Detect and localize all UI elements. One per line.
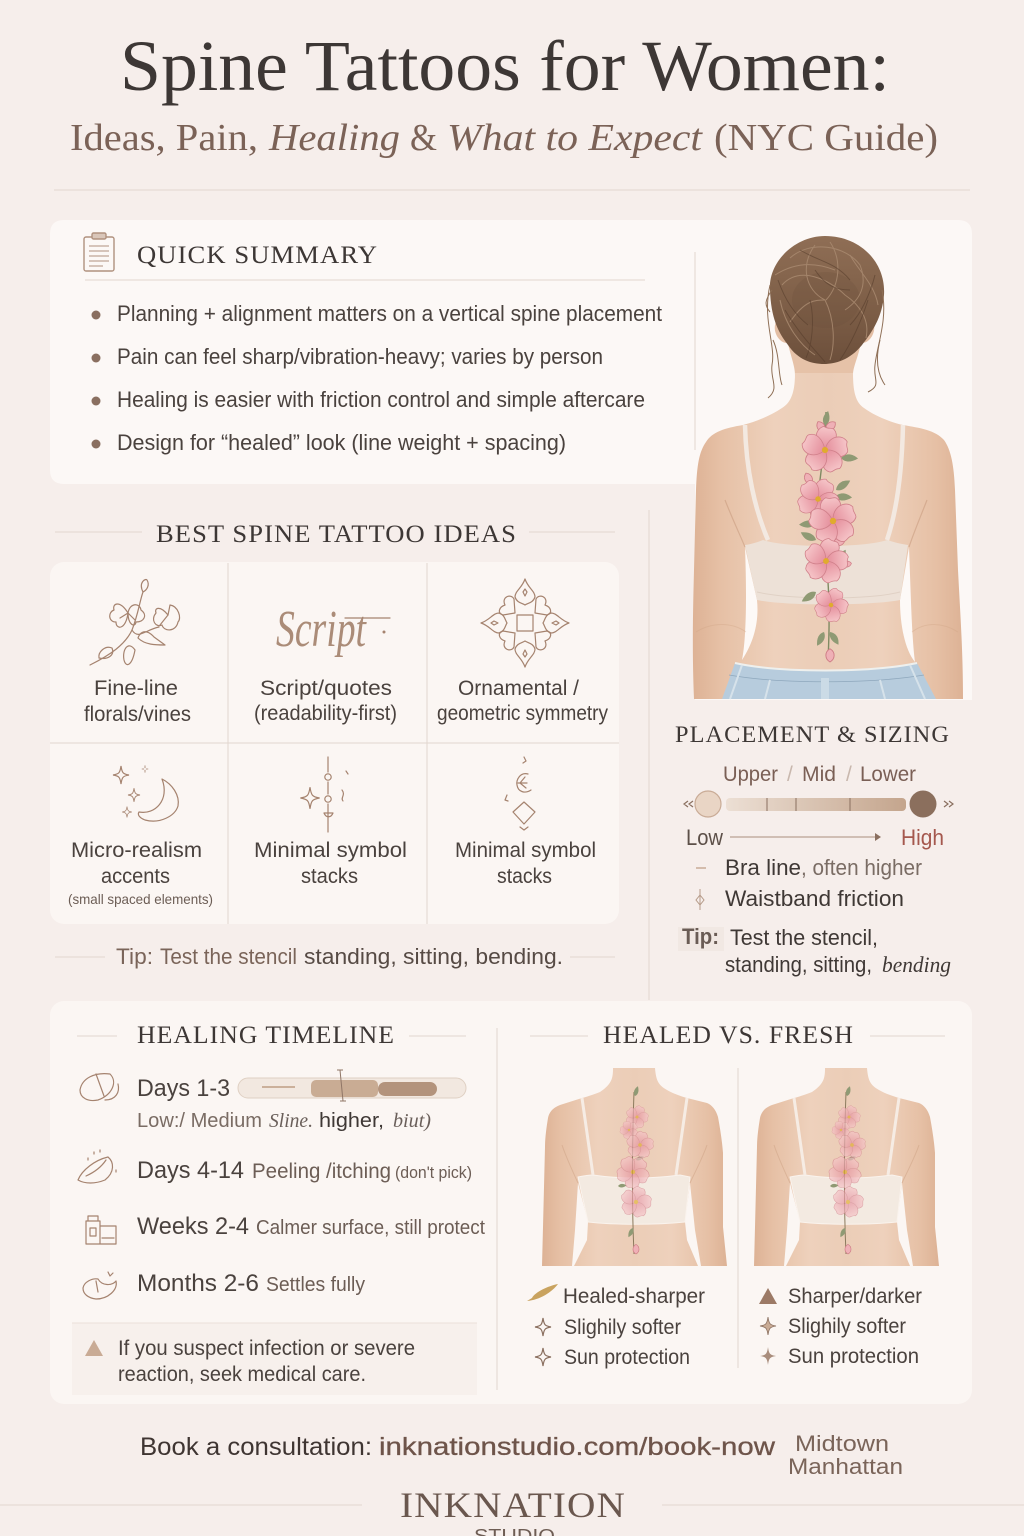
logo: inknation studio: INKNATION	[400, 1485, 626, 1525]
icon: floral branch	[90, 580, 180, 665]
icon: settled skin	[83, 1272, 116, 1299]
label: micro-realism accents: accents	[101, 865, 170, 888]
icon: script lettering: Script	[276, 601, 367, 658]
list: fresh notes	[759, 1285, 922, 1368]
summary bullet list: Design for “healed” look (line weight + spacing)	[117, 430, 566, 455]
placement labels: Upper	[723, 763, 778, 786]
summary bullet list	[92, 301, 662, 455]
timeline row: days 4-14	[78, 1150, 472, 1184]
subtitle: Ideas, Pain,	[70, 117, 258, 159]
timeline row: days 4-14: Peeling /itching	[252, 1160, 391, 1183]
label: minimal symbol stacks second: Minimal symbol	[455, 839, 596, 862]
placement labels: /	[787, 763, 793, 786]
subtitle: (NYC Guide)	[714, 117, 938, 159]
list: healed notes: Slighily softer	[564, 1316, 681, 1339]
panel: tattoo ideas grid	[50, 562, 619, 924]
idea: minimal symbol stacks second	[455, 757, 596, 888]
heading: healed vs fresh: HEALED VS. FRESH	[603, 1022, 854, 1049]
icon: aftercare jars	[86, 1216, 116, 1244]
label: script quotes: (readability-first)	[254, 702, 397, 725]
logo: inknation studio	[0, 1485, 1024, 1536]
timeline row: weeks 2-4	[86, 1213, 485, 1244]
idea: fine-line florals	[84, 580, 191, 726]
tip: placement: Test the stencil,	[730, 925, 878, 950]
list: healed notes: Sun protection	[564, 1346, 690, 1369]
tip: stencil testing: standing, sitting, bending.	[304, 944, 563, 969]
note: days 1-3: Low:/ Medium	[137, 1110, 262, 1132]
icon: feather	[527, 1284, 558, 1301]
label: minimal symbol stacks	[254, 839, 407, 888]
timeline row: days 4-14: Days 4-14	[137, 1157, 244, 1184]
footer: call to action: Book a consultation:	[140, 1433, 372, 1461]
note: days 1-3: Sline.	[269, 1110, 313, 1132]
label: micro-realism accents	[68, 839, 213, 907]
list: fresh notes: Sun protection	[788, 1345, 919, 1368]
placement labels: Lower	[860, 763, 916, 786]
icon: moon and stars	[113, 765, 178, 821]
icon: bandage	[80, 1074, 118, 1101]
bar: days 1-3 intensity	[238, 1070, 466, 1101]
tip: placement: standing, sitting,	[725, 952, 872, 977]
idea: script quotes	[254, 601, 397, 725]
summary bullet list: Healing is easier with friction control and simple aftercare	[117, 387, 645, 412]
floral spine tattoo	[787, 410, 863, 662]
footer: call to action: inknationstudio.com/book-now	[379, 1433, 776, 1461]
timeline row: days 1-3: Days 1-3	[137, 1075, 230, 1102]
label: minimal symbol stacks second: stacks	[497, 865, 552, 888]
placement labels: /	[846, 763, 852, 786]
list: fresh notes: Slighily softer	[788, 1315, 906, 1338]
placement labels: Mid	[802, 763, 836, 786]
icon: warning triangle	[759, 1288, 777, 1304]
subtitle: Healing	[268, 117, 400, 159]
note: bra line	[696, 855, 922, 880]
label: minimal symbol stacks second	[455, 839, 596, 888]
timeline row: months 2-6: Settles fully	[266, 1274, 365, 1296]
bra top	[745, 425, 908, 604]
idea: micro-realism accents	[68, 765, 213, 907]
photo: healed back	[542, 1068, 727, 1266]
ears	[775, 320, 787, 343]
note: bra line: , often higher	[801, 855, 922, 880]
title: Spine Tattoos for Women:	[120, 26, 890, 106]
subtitle: What to Expect	[447, 117, 704, 159]
slider: spine position	[684, 790, 953, 818]
label: minimal symbol stacks: Minimal symbol	[254, 839, 407, 862]
timeline row: days 4-14: (don't pick)	[395, 1163, 472, 1182]
icon: crescent and diamond	[505, 757, 535, 830]
idea: minimal symbol stacks	[254, 757, 407, 888]
label: fine-line florals: florals/vines	[84, 703, 191, 726]
photo: fresh back	[754, 1068, 939, 1266]
list: healed notes: Healed-sharper	[563, 1285, 705, 1308]
tip: placement	[678, 924, 951, 977]
pain scale: low to high	[686, 825, 944, 850]
tip: stencil testing: Tip:	[116, 944, 153, 969]
idea: ornamental geometric	[437, 579, 608, 725]
timeline row: months 2-6	[83, 1270, 365, 1299]
label: fine-line florals: Fine-line	[94, 677, 178, 700]
label: script quotes: Script/quotes	[260, 677, 392, 700]
panel: healing and comparison	[50, 1001, 972, 1404]
tip: stencil testing	[55, 944, 615, 969]
note: waistband friction: Waistband friction	[725, 886, 904, 911]
label: minimal symbol stacks: stacks	[301, 865, 358, 888]
panel: quick summary	[50, 220, 972, 700]
body silhouette	[693, 373, 963, 699]
note: days 1-3	[137, 1110, 431, 1132]
timeline row: days 1-3	[80, 1070, 466, 1132]
callout: medical warning	[72, 1323, 477, 1395]
summary bullet list: Pain can feel sharp/vibration-heavy; varies by person	[117, 344, 603, 369]
icon: warning triangle	[85, 1340, 103, 1356]
tip: placement: Tip:	[682, 924, 719, 949]
pain scale: low to high: Low	[686, 825, 723, 850]
subtitle: &	[410, 117, 437, 159]
label: ornamental geometric	[437, 677, 608, 725]
icon: ornament	[481, 579, 569, 667]
heading: placement and sizing: PLACEMENT & SIZING	[675, 722, 950, 747]
pain scale: low to high: High	[901, 825, 944, 850]
icon: symbol stack	[300, 757, 348, 832]
icon: peeling skin	[78, 1150, 116, 1183]
timeline row: weeks 2-4: Calmer surface, still protect	[256, 1217, 485, 1239]
tip: placement: bending	[882, 952, 951, 977]
list: fresh notes: Sharper/darker	[788, 1285, 922, 1308]
heading: quick summary: QUICK SUMMARY	[137, 242, 378, 269]
label: ornamental geometric: geometric symmetry	[437, 702, 608, 725]
note: days 1-3: biut)	[393, 1110, 431, 1132]
panel: placement and sizing	[675, 722, 953, 977]
hair	[766, 236, 885, 398]
jeans	[722, 663, 936, 699]
note: days 1-3: higher,	[319, 1110, 384, 1132]
label: micro-realism accents: Micro-realism	[71, 839, 202, 862]
label: script quotes	[254, 677, 397, 725]
label: fine-line florals	[84, 677, 191, 726]
tip: stencil testing: Test the stencil	[160, 944, 297, 969]
footer: call to action: Manhattan	[788, 1454, 903, 1479]
callout: medical warning: If you suspect infection or severe	[118, 1337, 415, 1360]
label: micro-realism accents: (small spaced elements)	[68, 891, 213, 907]
photo: woman's back with floral spine tattoo	[693, 236, 963, 699]
footer: call to action	[140, 1431, 903, 1479]
label: ornamental geometric: Ornamental /	[458, 677, 579, 700]
footer: call to action: Midtown	[795, 1431, 889, 1456]
icon: clipboard	[84, 233, 114, 271]
heading: healing timeline: HEALING TIMELINE	[137, 1022, 395, 1049]
timeline row: weeks 2-4: Weeks 2-4	[137, 1213, 249, 1240]
summary bullet list: Planning + alignment matters on a vertical spine placement	[117, 301, 662, 326]
timeline row: months 2-6: Months 2-6	[137, 1270, 259, 1297]
callout: medical warning: reaction, seek medical care.	[118, 1363, 366, 1386]
section heading: best spine tattoo ideas: BEST SPINE TATTOO IDEAS	[156, 521, 517, 548]
list: healed notes	[527, 1284, 705, 1369]
note: bra line: Bra line	[725, 855, 801, 880]
placement labels	[723, 763, 916, 786]
subtitle	[70, 117, 938, 159]
